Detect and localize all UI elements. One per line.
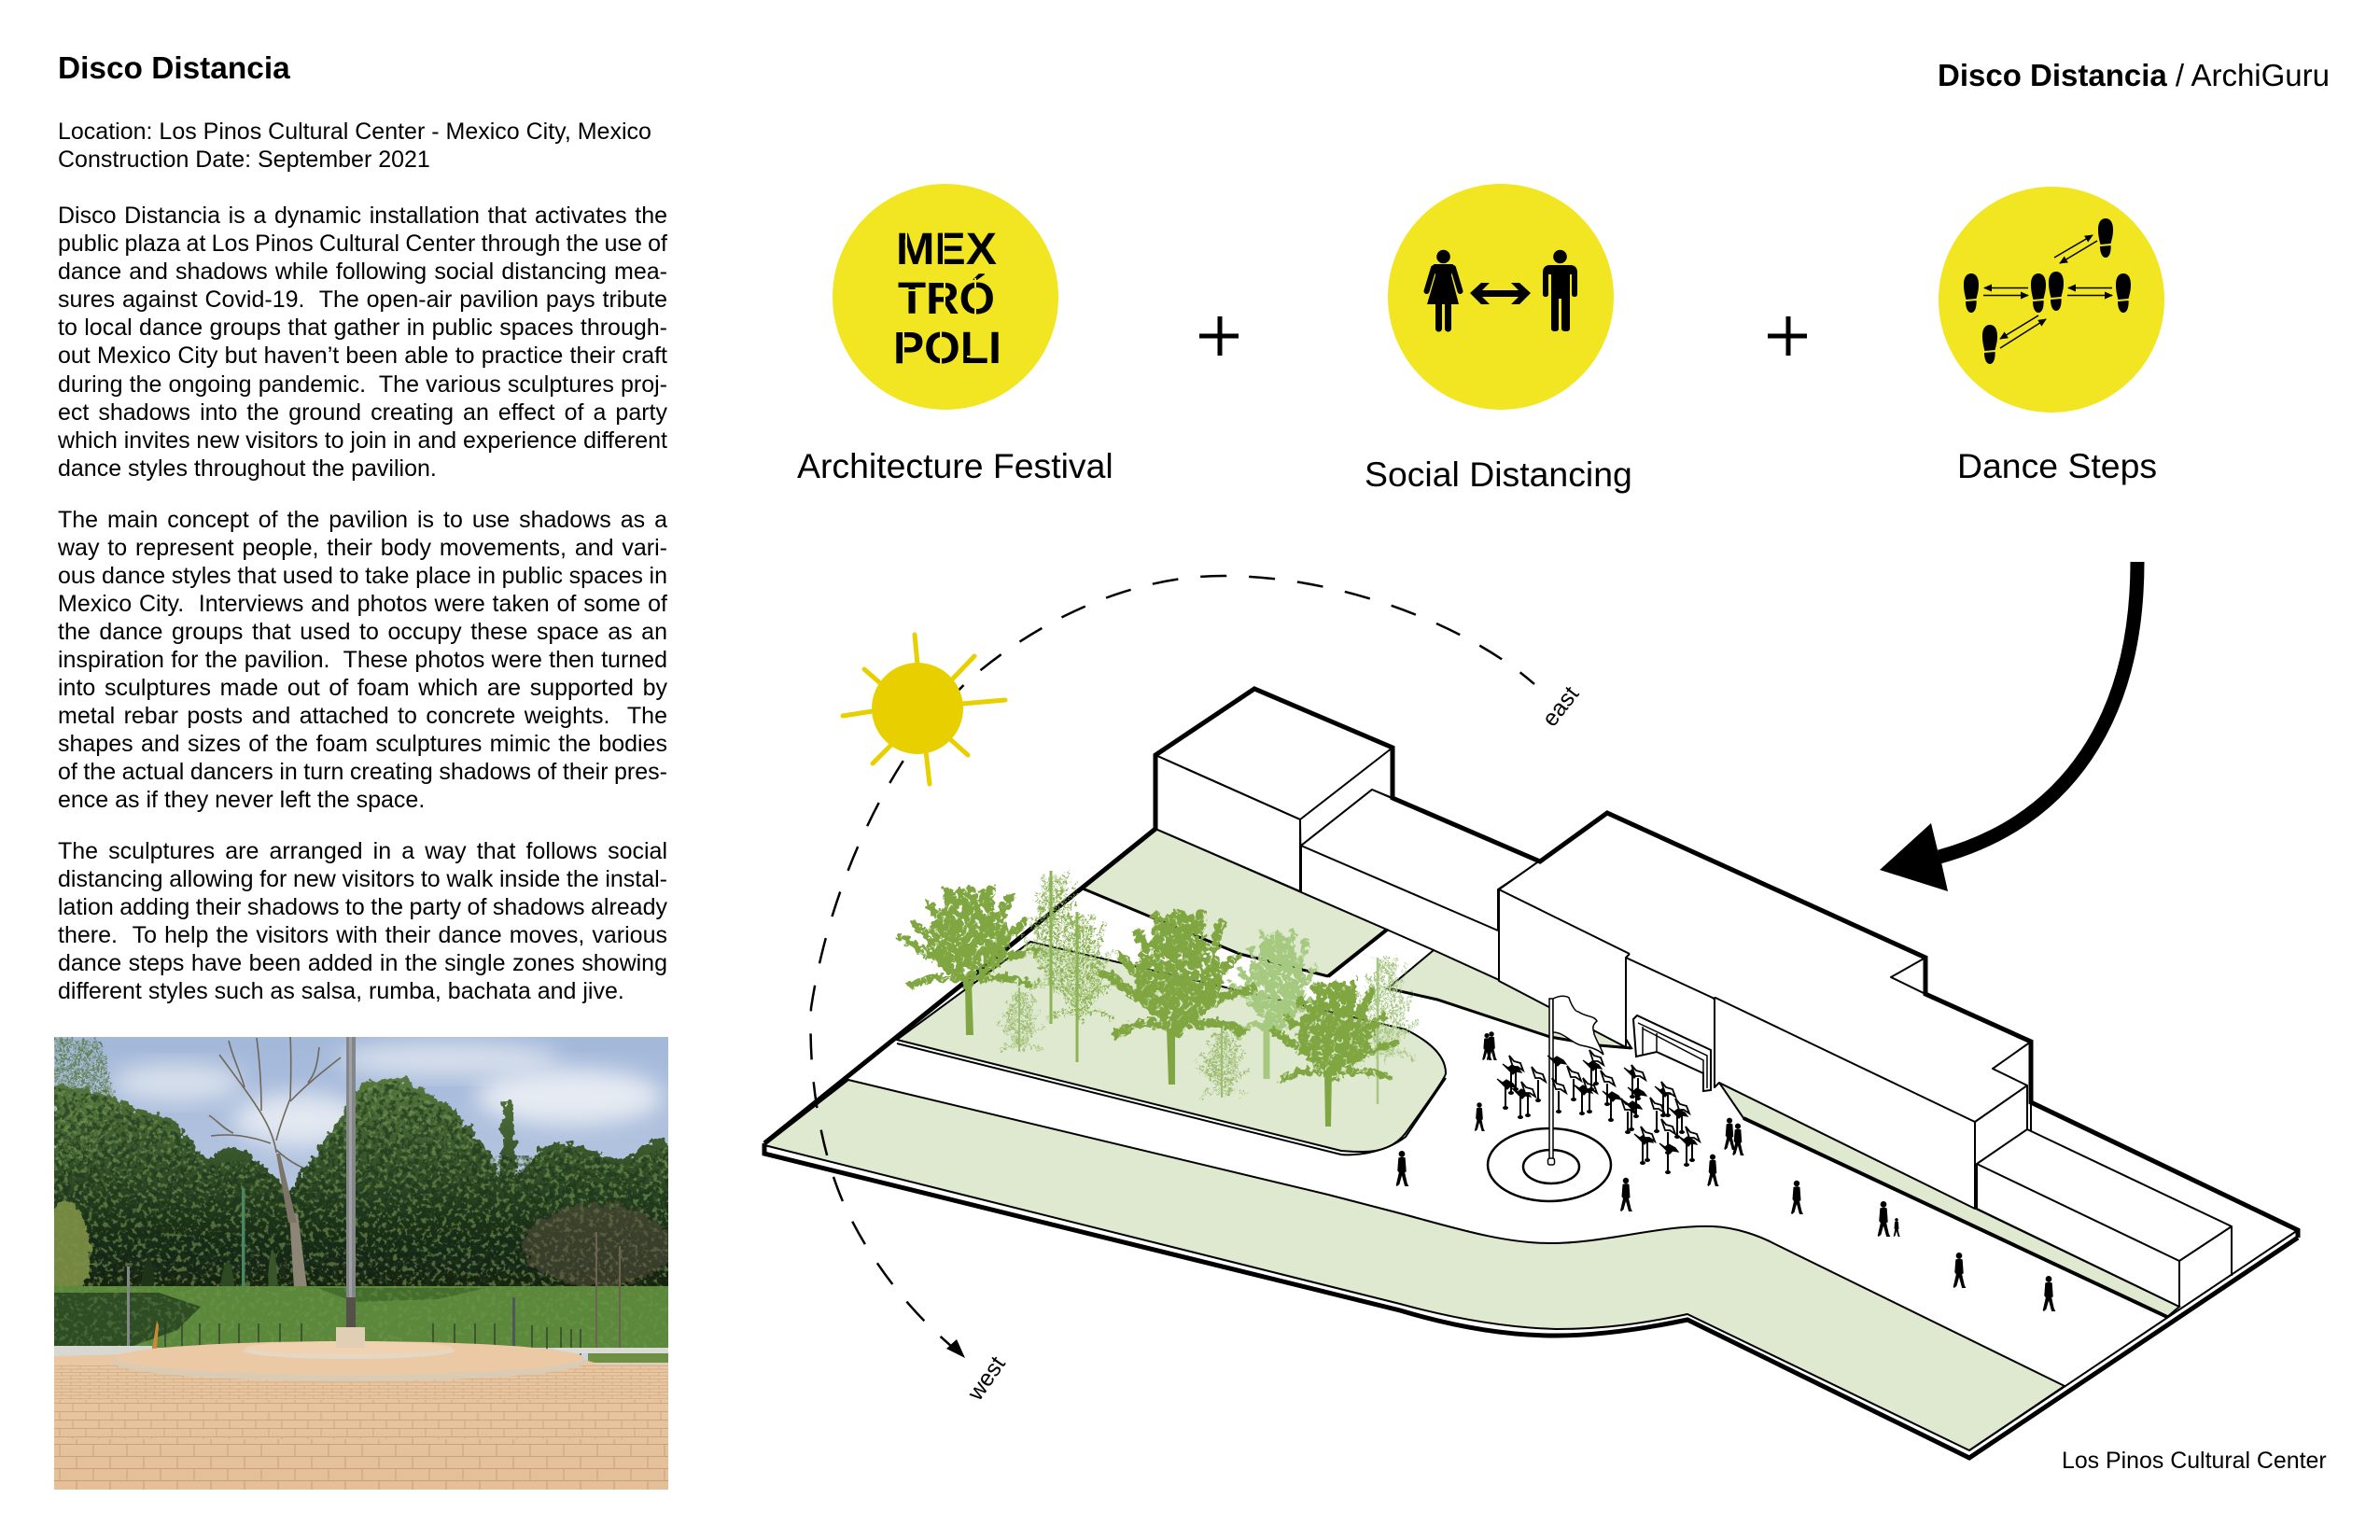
- caption: los pinos cultural center: Los Pinos Cultural Center: [2062, 1448, 2327, 1474]
- paragraph one: [58, 203, 667, 482]
- paragraph two: the dance groups that used to occupy these space as an: [58, 619, 667, 645]
- building block A: [1155, 748, 1393, 891]
- paragraph one: to local dance groups that gather in public spaces through-: [58, 315, 667, 341]
- woman figure: [1426, 250, 1460, 329]
- paragraph three: distancing allowing for new visitors to walk inside the instal-: [58, 866, 667, 892]
- photo of the plaza: [45, 1037, 672, 1490]
- paragraph three: The sculptures are arranged in a way that follows social: [58, 838, 667, 864]
- circle: social distancing: [1388, 184, 1614, 410]
- buildings: [1155, 748, 2232, 1307]
- label: dance steps: Dance Steps: [1957, 446, 2157, 485]
- paragraph one: public plaza at Los Pinos Cultural Center through the use of: [58, 231, 667, 257]
- paragraph three: dance steps have been added in the single zones showing: [58, 950, 667, 976]
- paragraph two: metal rebar posts and attached to concrete weights. The: [58, 703, 667, 729]
- paragraph two: Mexico City. Interviews and photos were taken of some of: [58, 591, 667, 617]
- plus two: [1768, 316, 1807, 356]
- step arrows: [1983, 235, 2112, 348]
- paragraph one: dance and shadows while following social distancing mea-: [58, 259, 667, 285]
- entrance green strip: [1388, 950, 1631, 1048]
- circle: mextropoli logo: TRÓ: [898, 273, 995, 324]
- paragraph two: inspiration for the pavilion. These photos were then turned: [58, 647, 667, 673]
- project location and date: Location: Los Pinos Cultural Center - Mexico City, Mexico: [58, 119, 651, 145]
- project location and date: Construction Date: September 2021: [58, 147, 430, 173]
- header credit: Disco Distancia / ArchiGuru: [1938, 58, 2330, 91]
- paragraph one: Disco Distancia is a dynamic installation that activates the: [58, 203, 667, 229]
- doorway: [1633, 1015, 1711, 1091]
- right green strip: [1719, 1083, 2179, 1317]
- paragraph two: [58, 506, 668, 813]
- paragraph three: [58, 838, 667, 1004]
- label: architecture festival: Architecture Festival: [797, 446, 1113, 485]
- paragraph one: during the ongoing pandemic. The various sculptures proj-: [58, 371, 667, 398]
- man figure: [1543, 250, 1577, 331]
- park green block: [897, 942, 1446, 1152]
- lower green lawn: [764, 1080, 2065, 1450]
- paragraph two: into sculptures made out of foam which are supported by: [58, 675, 667, 701]
- building block B: [1301, 790, 1540, 931]
- label: east: east: [1537, 681, 1584, 732]
- paragraph two: of the actual dancers in turn creating shadows of their pres-: [58, 759, 667, 785]
- label: west: west: [962, 1352, 1011, 1406]
- paragraph two: way to represent people, their body movements, and vari-: [58, 535, 667, 561]
- paragraph one: ect shadows into the ground creating an effect of a party: [58, 399, 667, 426]
- circle: mextropoli logo: MEX: [896, 225, 997, 274]
- trees: [901, 871, 1419, 1127]
- plaza rings and flag pole: [1488, 996, 1611, 1201]
- circle: dance steps: [1939, 187, 2164, 413]
- paragraph three: there. To help the visitors with their dance moves, various: [58, 922, 667, 948]
- paragraph two: The main concept of the pavilion is to use shadows as a: [58, 506, 667, 532]
- big curved arrow: [1880, 562, 2137, 891]
- main building: [1499, 813, 2031, 1209]
- main dark trees: [901, 889, 1395, 1127]
- footprints: [1964, 218, 2131, 364]
- circle: mextropoli logo: POLI: [893, 324, 1001, 373]
- paragraph one: dance styles throughout the pavilion.: [58, 455, 437, 482]
- project location and date: [58, 119, 651, 173]
- people silhouettes: [1396, 1031, 2055, 1311]
- flag: [1553, 996, 1603, 1055]
- paragraph three: different styles such as salsa, rumba, bachata and jive.: [58, 978, 624, 1004]
- sun path dashed arc: [811, 576, 1534, 1354]
- paragraph one: sures against Covid-19. The open-air pavilion pays tribute: [58, 287, 667, 313]
- double arrow: [1470, 283, 1531, 304]
- paragraph three: lation adding their shadows to the party of shadows already: [58, 894, 667, 920]
- sun icon: [843, 635, 1005, 784]
- sparse background trees: [1352, 958, 1419, 1104]
- site axonometric drawing: [764, 689, 2298, 1458]
- paragraph one: out Mexico City but haven’t been able to practice their craft: [58, 343, 667, 369]
- pale background trees: [1229, 932, 1325, 1079]
- label: social distancing: Social Distancing: [1365, 455, 1632, 494]
- site base slab: [764, 689, 2298, 1458]
- small sapling trees: [997, 987, 1249, 1098]
- title: Disco Distancia: [58, 51, 290, 86]
- low block D: [1977, 1085, 2232, 1307]
- paragraph one: which invites new visitors to join in and experience different: [58, 427, 667, 454]
- paragraph two: ous dance styles that used to take place in public spaces in: [58, 563, 667, 589]
- west arrow head: [946, 1339, 965, 1358]
- upper green lawn: [1083, 829, 1387, 976]
- sculptures: [1497, 1050, 1700, 1174]
- paragraph two: ence as if they never left the space.: [58, 787, 425, 813]
- heavy site outline: [764, 689, 2298, 1238]
- circle: mextropoli logo: [833, 184, 1058, 410]
- plus one: [1199, 316, 1239, 356]
- paragraph two: shapes and sizes of the foam sculptures mimic the bodies: [58, 731, 667, 757]
